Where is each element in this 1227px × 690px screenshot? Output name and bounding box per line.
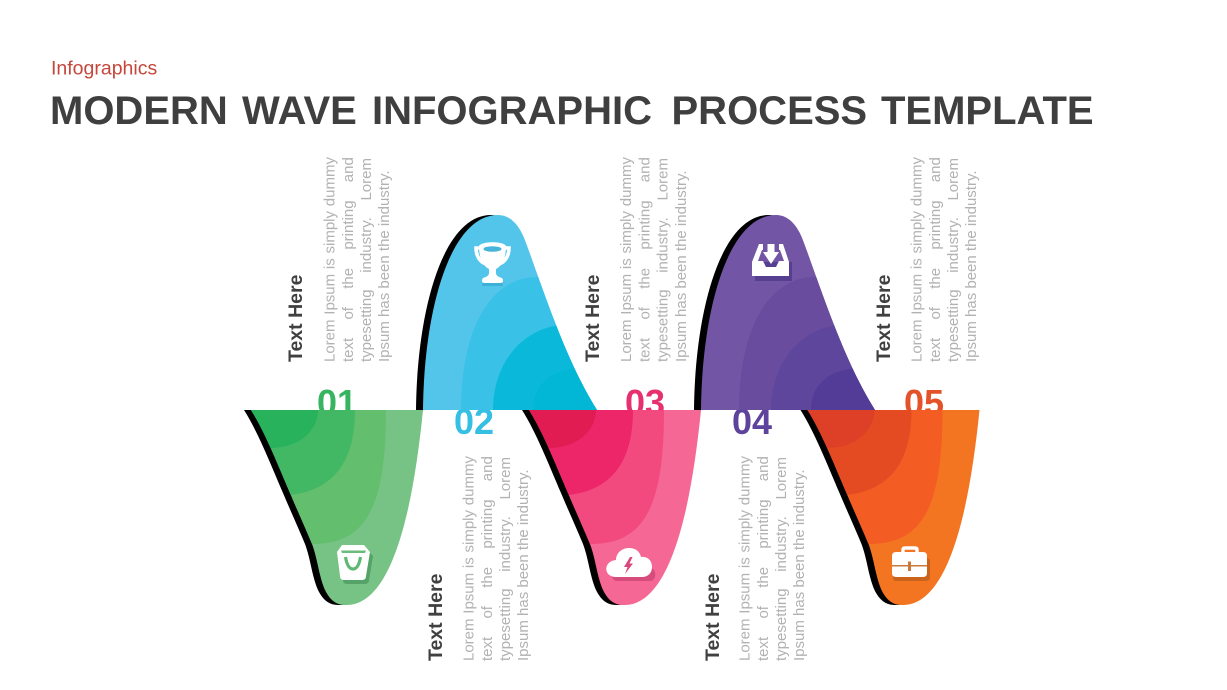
text block 02: text of the printing and [479, 456, 496, 661]
text block 04: Text Here [702, 573, 724, 661]
wave 01: green [244, 410, 423, 605]
number 02: 02 [454, 401, 494, 442]
title: PROCESS [672, 89, 867, 133]
text block 01: Text Here [285, 274, 307, 362]
text block 02 [425, 456, 532, 661]
text block 05: typesetting industry. Lorem [945, 158, 962, 362]
text block 04: text of the printing and [755, 456, 772, 661]
text block 03: text of the printing and [636, 157, 654, 362]
text block 01 [285, 157, 393, 362]
text block 01: Ipsum has been the industry. [376, 170, 393, 362]
text block 05: text of the printing and [927, 157, 944, 362]
icon: inbox tray [752, 244, 792, 281]
number 03: 03 [625, 382, 665, 423]
icon: trophy [476, 242, 509, 286]
text block 01: typesetting industry. Lorem [358, 158, 375, 362]
text block 05: Ipsum has been the industry. [963, 170, 980, 362]
wave 04: purple [694, 215, 875, 410]
number 05: 05 [904, 382, 944, 423]
title: MODERN [50, 89, 228, 133]
icon: shopping bag [337, 545, 373, 584]
subtitle: Infographics [51, 58, 157, 80]
text block 04: Lorem Ipsum is simply dummy [736, 456, 754, 661]
wave 02: blue [416, 215, 597, 410]
text block 02: Lorem Ipsum is simply dummy [460, 456, 478, 661]
text block 02: Ipsum has been the industry. [515, 470, 532, 661]
text block 02: Text Here [425, 573, 447, 661]
text block 04: Ipsum has been the industry. [791, 470, 808, 661]
text block 03: Ipsum has been the industry. [673, 170, 690, 362]
text block 04 [702, 456, 808, 661]
icon: cloud with lightning [606, 548, 655, 581]
number 04: 04 [732, 401, 772, 442]
wave 03: pink [522, 410, 701, 605]
icon: briefcase [892, 548, 930, 581]
text block 03: typesetting industry. Lorem [654, 158, 672, 362]
text block 03: Text Here [582, 274, 604, 362]
text block 03: Lorem Ipsum is simply dummy [618, 157, 635, 362]
title: TEMPLATE [881, 89, 1094, 133]
text block 02: typesetting industry. Lorem [497, 457, 514, 661]
text block 01: Lorem Ipsum is simply dummy [322, 157, 338, 362]
text block 03 [582, 157, 690, 362]
number 01: 01 [317, 382, 357, 423]
text block 05: Lorem Ipsum is simply dummy [908, 157, 926, 362]
text block 04: typesetting industry. Lorem [773, 457, 790, 661]
text block 05: Text Here [873, 274, 895, 362]
title: WAVE [242, 89, 357, 133]
text block 01: text of the printing and [340, 157, 357, 362]
wave 05: orange [800, 410, 980, 605]
text block 05 [873, 157, 980, 362]
title: INFOGRAPHIC [372, 89, 652, 133]
